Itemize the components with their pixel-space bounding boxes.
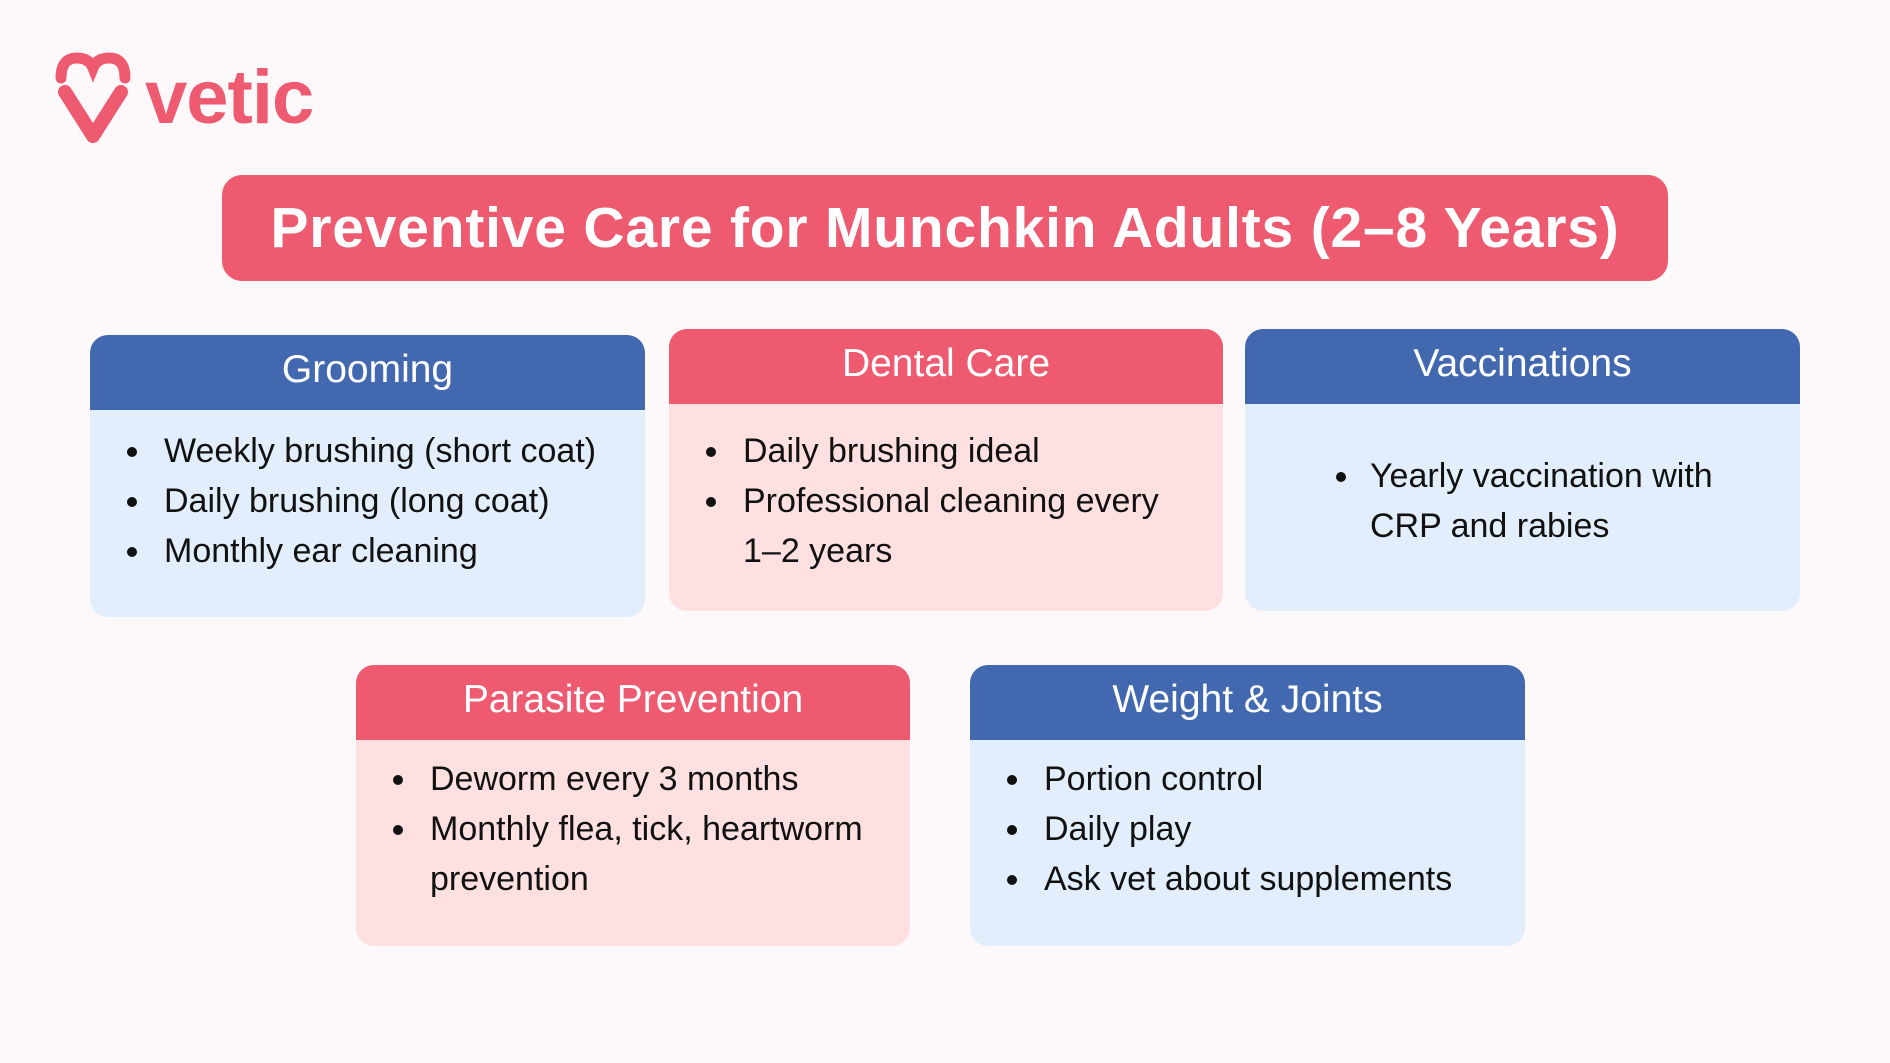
panel: grooming: Monthly ear cleaning [164,532,478,570]
brand name: vetic [145,55,313,140]
panel: dental care: Daily brushing ideal [743,432,1040,470]
panel: vaccinations: Yearly vaccination with CRP and rabies [1370,457,1713,545]
panel: weight & joints [970,665,1525,946]
panel: weight & joints: Portion control [1044,760,1263,798]
panel: parasite prevention: Monthly flea, tick, heartworm prevention [430,810,863,898]
panel: vaccinations [1245,329,1800,611]
panel: parasite prevention: Parasite Prevention [463,678,803,721]
panel: parasite prevention [356,665,910,946]
panel: dental care [669,329,1223,611]
title: Preventive Care for Munchkin Adults (2–8 Years) [270,196,1620,260]
panel: vaccinations: Vaccinations [1413,342,1632,385]
panel: weight & joints: Daily play [1044,810,1191,848]
icon: heart V [56,52,130,143]
logo [56,52,313,143]
panel: parasite prevention: Deworm every 3 months [430,760,798,798]
panel: grooming [90,335,645,617]
panel: grooming: Daily brushing (long coat) [164,482,550,520]
panel: dental care: Dental Care [842,342,1050,385]
panel: grooming: Weekly brushing (short coat) [164,432,596,470]
panel: grooming: Grooming [282,348,453,391]
panel: weight & joints: Weight & Joints [1112,678,1383,721]
title [222,175,1668,281]
panel: weight & joints: Ask vet about supplements [1044,860,1452,898]
panel: dental care: Professional cleaning every 1–2 years [743,482,1159,570]
